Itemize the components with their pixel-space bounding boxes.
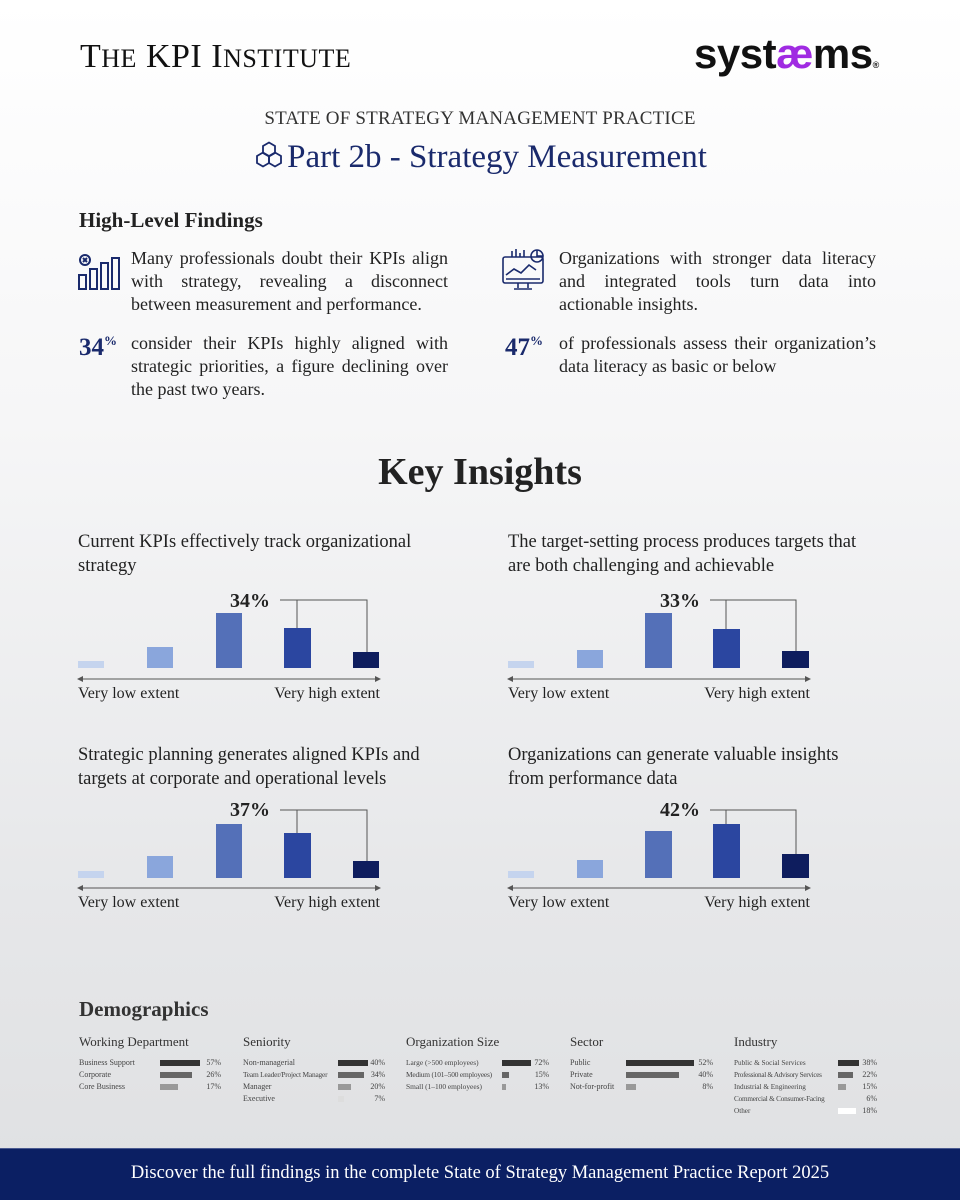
logo: The KPI Institute: THE KPI INSTITUTE (80, 38, 351, 75)
demographics: organization size: 72% (534, 1058, 549, 1067)
demographics: working department: Working Department (79, 1034, 189, 1049)
demographics: working department (79, 1034, 221, 1091)
heading: Demographics: Demographics (79, 997, 208, 1021)
demographics: industry: Other (734, 1107, 750, 1115)
chart title 1: Current KPIs effectively track organizational strategy (78, 532, 411, 576)
demographics: organization size: Large (>500 employees) (406, 1058, 479, 1067)
demographics: sector: Private (570, 1070, 593, 1079)
chart 2: Very low extent (508, 685, 610, 702)
heading: High-Level Findings: High-Level Findings (79, 208, 263, 232)
demographics: seniority: 7% (374, 1094, 385, 1103)
chart 2 (508, 590, 811, 702)
demographics: organization size (406, 1034, 549, 1091)
demographics: working department: 57% (206, 1058, 221, 1067)
chart 1: 34% (230, 590, 270, 612)
demographics: industry (734, 1034, 877, 1115)
icon: bar chart with x (78, 254, 120, 290)
title: Part 2b - Strategy Measurement (287, 139, 707, 175)
footer banner: Discover the full findings in the complete State of Strategy Management Practice Report 2025 (131, 1163, 829, 1183)
demographics: seniority (243, 1034, 385, 1103)
chart 4 (508, 799, 811, 911)
demographics: sector: 40% (698, 1070, 713, 1079)
chart 2: Very high extent (704, 685, 811, 702)
icon: monitor analytics (502, 249, 544, 290)
demographics: organization size: Organization Size (406, 1034, 499, 1049)
logo: systaems: systæms® (694, 30, 879, 77)
demographics: seniority: Executive (243, 1094, 275, 1103)
chart title 4: Organizations can generate valuable insights from performance data (508, 745, 838, 789)
demographics: working department: Core Business (79, 1082, 125, 1091)
chart 1: Very high extent (274, 685, 381, 702)
demographics: seniority: Team Leader/Project Manager (243, 1070, 327, 1079)
demographics: sector: 8% (702, 1082, 713, 1091)
chart 4: Very high extent (704, 894, 811, 911)
demographics: sector: Public (570, 1058, 590, 1067)
stat: 34%: 34% (79, 333, 117, 361)
icon: hexagons (256, 142, 282, 168)
demographics: industry: Industrial & Engineering (734, 1083, 806, 1091)
chart 3: 37% (230, 799, 270, 821)
chart 3 (78, 799, 381, 911)
demographics: organization size: Small (1–100 employees) (406, 1082, 482, 1091)
demographics: organization size: Medium (101–500 employees) (406, 1070, 492, 1079)
text: 34% statement: consider their KPIs highly aligned with strategic priorities, a figure declining over the past two years. (131, 333, 448, 399)
demographics: organization size: 13% (534, 1082, 549, 1091)
demographics: sector (570, 1034, 713, 1091)
demographics: industry: 18% (862, 1106, 877, 1115)
demographics: working department: Business Support (79, 1058, 135, 1067)
chart 2: 33% (660, 590, 700, 612)
chart title 2: The target-setting process produces targets that are both challenging and achievable (508, 532, 856, 576)
demographics: industry: 15% (862, 1082, 877, 1091)
demographics: seniority: 40% (370, 1058, 385, 1067)
chart 3: Very high extent (274, 894, 381, 911)
chart title 3: Strategic planning generates aligned KPIs and targets at corporate and operational levels (78, 745, 420, 789)
demographics: working department: 17% (206, 1082, 221, 1091)
demographics: industry: 6% (866, 1094, 877, 1103)
demographics: industry: Public & Social Services (734, 1059, 806, 1067)
demographics: seniority: 20% (370, 1082, 385, 1091)
subtitle: STATE OF STRATEGY MANAGEMENT PRACTICE (264, 108, 696, 129)
demographics: seniority: Manager (243, 1082, 271, 1091)
stat: 47%: 47% (505, 333, 543, 361)
demographics: seniority: Non-managerial (243, 1058, 295, 1067)
chart 1: Very low extent (78, 685, 180, 702)
demographics: sector: 52% (698, 1058, 713, 1067)
chart 4: 42% (660, 799, 700, 821)
demographics: industry: Industry (734, 1034, 777, 1049)
demographics: working department: Corporate (79, 1070, 111, 1079)
demographics: working department: 26% (206, 1070, 221, 1079)
demographics: industry: Professional & Advisory Services (734, 1071, 822, 1079)
text: finding 1: Many professionals doubt their KPIs align with strategy, revealing a disconnect between measurement and performance. (131, 248, 448, 314)
demographics: industry: 38% (862, 1058, 877, 1067)
demographics: seniority: Seniority (243, 1034, 291, 1049)
demographics: organization size: 15% (535, 1070, 549, 1079)
text: 47% statement: of professionals assess their organization’s data literacy as basic or below (559, 333, 876, 376)
demographics: industry: Commercial & Consumer-Facing (734, 1095, 824, 1103)
text: finding 2: Organizations with stronger data literacy and integrated tools turn data into actionable insights. (559, 248, 876, 314)
footer banner (0, 1148, 960, 1200)
heading: Key Insights: Key Insights (378, 451, 582, 493)
chart 3: Very low extent (78, 894, 180, 911)
demographics: industry: 22% (862, 1070, 877, 1079)
demographics: seniority: 34% (371, 1070, 385, 1079)
chart 1 (78, 590, 381, 702)
demographics: sector: Sector (570, 1034, 603, 1049)
demographics: sector: Not-for-profit (570, 1082, 614, 1091)
chart 4: Very low extent (508, 894, 610, 911)
